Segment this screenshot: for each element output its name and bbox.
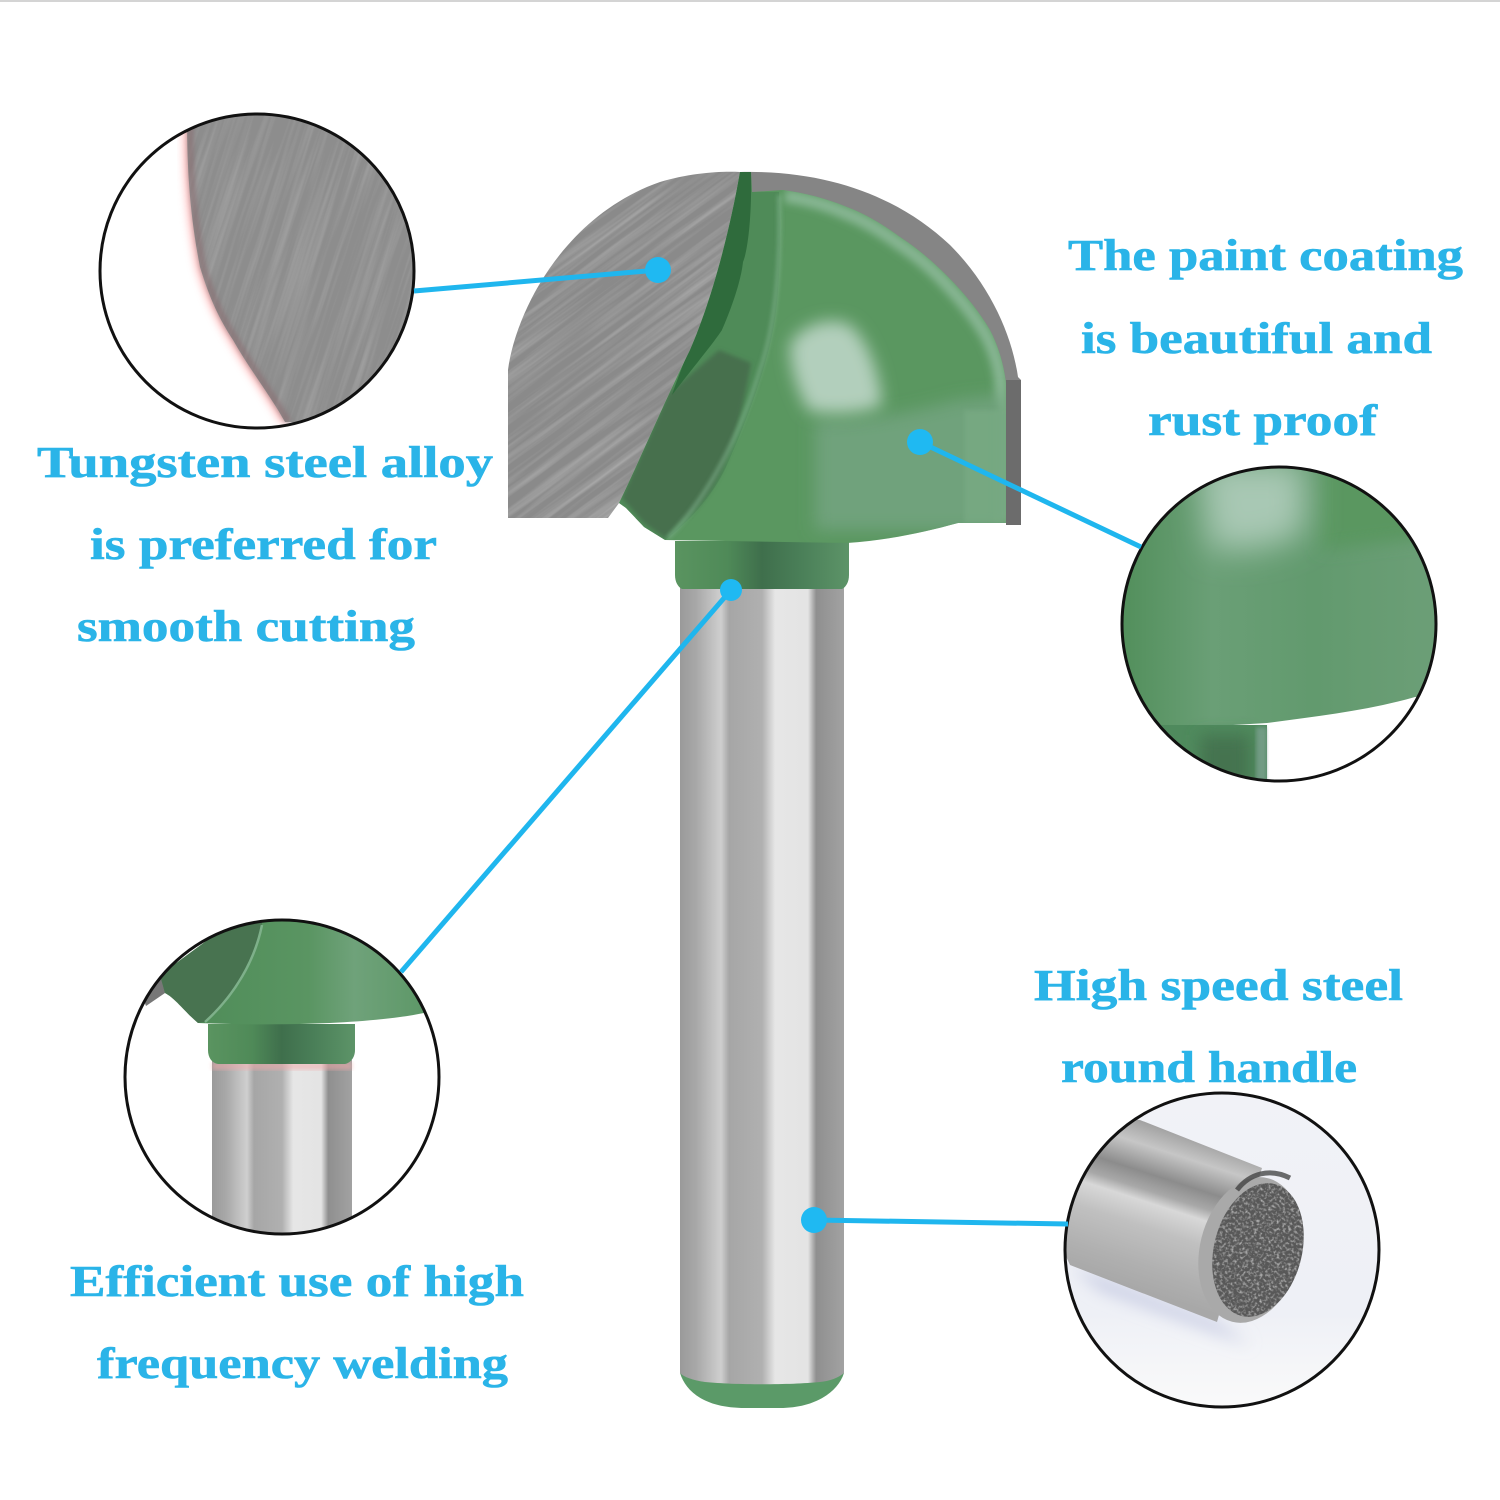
text: high speed steel: round handle <box>1061 1043 1357 1092</box>
inset: round handle <box>1040 1093 1379 1407</box>
text: high frequency welding <box>70 1257 524 1388</box>
collar <box>675 541 849 589</box>
inset: tungsten blade <box>98 112 416 430</box>
callout line: tungsten blade <box>414 257 671 291</box>
callout line: welding <box>401 579 742 972</box>
text: high speed steel <box>1034 961 1403 1092</box>
text: tungsten steel alloy: is preferred for <box>90 520 437 569</box>
lower lighter area <box>815 395 1004 530</box>
text: paint coating: rust proof <box>1148 396 1379 445</box>
handle end rim <box>1198 1177 1289 1323</box>
specular highlight <box>790 321 882 413</box>
text: paint coating <box>1068 231 1463 445</box>
text: paint coating: The paint coating <box>1068 231 1463 280</box>
shank <box>680 582 844 1408</box>
text: tungsten steel alloy <box>37 438 493 651</box>
rear blade rim <box>740 172 1021 525</box>
dark flute strip <box>672 172 751 395</box>
green coated body <box>619 172 1006 543</box>
callout line: paint coating <box>907 429 1141 547</box>
coating rim light <box>785 196 1001 523</box>
inset: paint coating <box>1120 466 1438 782</box>
inset: high frequency welding <box>125 900 439 1240</box>
router bit: main product <box>258 0 1021 1408</box>
text: high speed steel: High speed steel <box>1034 961 1403 1010</box>
text: tungsten steel alloy: smooth cutting <box>77 602 415 651</box>
flute shoulder <box>619 172 780 540</box>
text: tungsten steel alloy: Tungsten steel alloy <box>37 438 493 487</box>
handle end face <box>1212 1183 1304 1317</box>
text: high frequency welding: frequency welding <box>97 1339 508 1388</box>
tungsten blade <box>508 172 740 518</box>
text: paint coating: is beautiful and <box>1081 314 1432 363</box>
text: high frequency welding: Efficient use of high <box>70 1257 524 1306</box>
callout line: handle <box>801 1207 1068 1233</box>
